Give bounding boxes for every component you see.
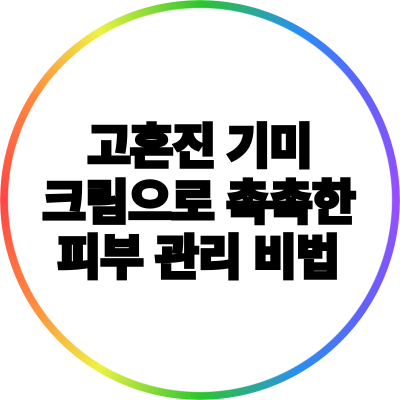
title line 2: 크림으로 촉촉한 <box>42 177 356 230</box>
title line 3: 피부 관리 비법 <box>57 232 340 285</box>
title line 1: 고혼진 기미 <box>87 121 313 174</box>
